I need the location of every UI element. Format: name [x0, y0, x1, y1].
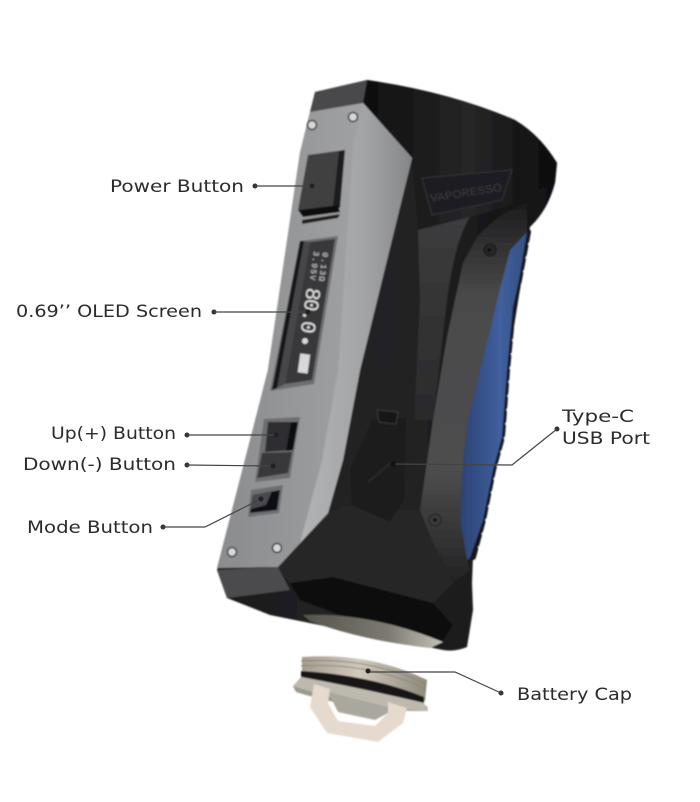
label: battery cap	[366, 668, 632, 704]
flange	[293, 686, 428, 711]
device body	[217, 80, 557, 651]
flange top	[293, 677, 428, 711]
side screw lower	[429, 514, 441, 526]
o-ring	[301, 671, 424, 703]
cover latch	[377, 410, 398, 424]
top left bevel	[310, 80, 367, 114]
label: power button	[110, 177, 314, 196]
label: up button	[51, 424, 278, 443]
label: USB port: USB Port	[562, 429, 651, 448]
label: up button: Up(+) Button	[51, 424, 176, 443]
body silhouette	[217, 80, 557, 651]
battery opening	[303, 615, 443, 648]
battery indicator	[298, 353, 310, 374]
silver bright facet	[300, 103, 412, 543]
watt icon	[302, 338, 308, 344]
battery cap	[293, 656, 428, 742]
screen	[272, 239, 335, 390]
power button	[298, 150, 345, 224]
screen bezel	[270, 236, 338, 391]
label: mode button: Mode Button	[27, 518, 153, 537]
down button	[257, 452, 292, 478]
threaded body	[302, 656, 427, 701]
logo text: VAPORESSO	[430, 182, 503, 205]
lower body facets	[278, 505, 453, 603]
blue grip panel	[460, 232, 527, 560]
button recess	[255, 417, 300, 482]
mode button	[248, 485, 283, 517]
label: mode button	[27, 496, 264, 537]
label: USB port	[390, 407, 651, 466]
label: battery cap: Battery Cap	[517, 685, 632, 704]
silver face	[217, 103, 412, 568]
side gray stripe	[420, 203, 527, 583]
pull tab	[310, 684, 407, 742]
threads	[301, 660, 426, 689]
side screw	[484, 244, 496, 256]
grip ridges	[473, 232, 528, 557]
label: OLED screen	[16, 302, 310, 321]
logo plate	[422, 170, 512, 215]
screws on face	[228, 112, 358, 556]
screen: 3.95V	[307, 251, 320, 281]
cap underside	[328, 692, 388, 720]
port cover	[350, 410, 406, 522]
top cap	[363, 80, 557, 230]
port panel	[367, 370, 417, 510]
inner gray facet	[414, 217, 470, 420]
screen: 0.13Ω	[316, 252, 329, 282]
readout: 80.0	[294, 286, 323, 335]
label: down button	[23, 455, 276, 474]
label: OLED screen: 0.69’’ OLED Screen	[16, 302, 202, 321]
label: down button: Down(-) Button	[23, 455, 176, 474]
label: power button: Power Button	[110, 177, 244, 196]
up button	[265, 422, 298, 452]
label: USB port: Type-C	[561, 407, 634, 426]
